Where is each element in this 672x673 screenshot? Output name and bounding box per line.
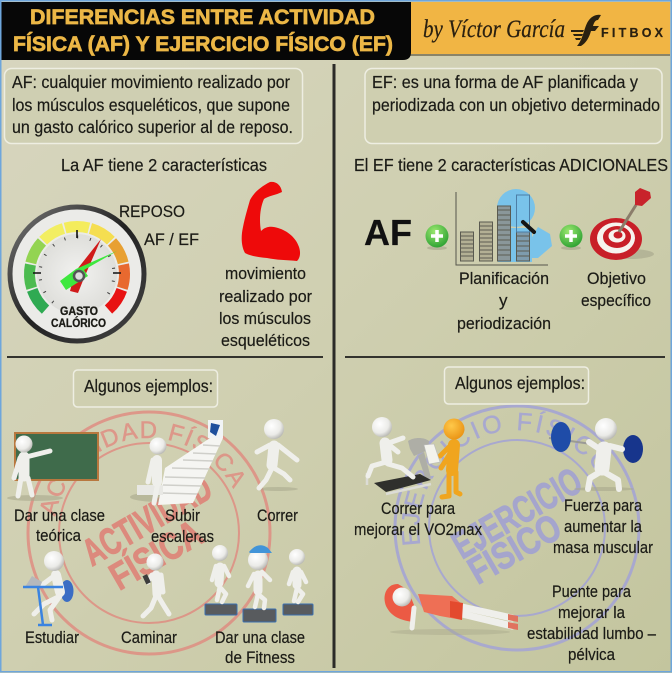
header author band — [400, 2, 670, 56]
example label: fuerza: Fuerza para — [564, 496, 642, 515]
caption line 2: realizado por — [219, 287, 312, 306]
examples box right — [444, 367, 588, 404]
label line 2: escaleras — [151, 527, 214, 546]
caption line 4: esqueléticos — [221, 331, 310, 350]
example: treadmill runner and coach — [367, 417, 464, 497]
legs — [462, 607, 512, 626]
icon: flexed arm muscle — [242, 182, 300, 261]
coach — [452, 445, 454, 470]
example: plank — [384, 584, 518, 635]
gauge label line 2: CALÓRICO — [51, 315, 106, 330]
example: teacher at blackboard — [7, 433, 98, 501]
label line 2: teórica — [36, 526, 81, 545]
examples box left — [74, 370, 218, 407]
example label: puente — [527, 582, 656, 664]
objective caption: Objetivo — [587, 269, 646, 288]
gauge — [10, 207, 144, 341]
label line 2: aumentar la — [564, 517, 642, 536]
title line 1: DIFERENCIAS ENTRE ACTIVIDAD — [30, 6, 375, 29]
muscle caption — [219, 264, 312, 350]
label line 2: mejorar el VO2max — [354, 520, 482, 539]
example label: teoría — [14, 506, 105, 545]
stamp center text 2: FÍSICA — [102, 511, 210, 599]
example: barbell lifter — [549, 418, 643, 491]
AF text line 3: un gasto calórico superior al de reposo. — [12, 117, 293, 137]
example label: puente: Puente para — [552, 582, 631, 601]
title band — [0, 2, 411, 60]
left horizontal divider — [7, 356, 323, 358]
label line 2: de Fitness — [225, 648, 295, 667]
author name: by Víctor García — [423, 16, 565, 43]
needle hub — [74, 271, 84, 281]
shirt and shorts — [418, 594, 462, 620]
example: walker — [142, 554, 169, 616]
caption periodización: periodización — [457, 314, 551, 333]
muscle caption: movimiento — [225, 264, 306, 283]
bar hatching — [461, 210, 529, 258]
heading: AF characteristics: La AF tiene 2 características — [61, 155, 267, 175]
gauge label: GASTO — [60, 304, 98, 318]
treadmill — [408, 438, 431, 480]
gauge label — [51, 304, 106, 330]
example: runner — [257, 419, 298, 491]
AF text line 1: AF: cualquier movimiento realizado por — [12, 72, 290, 92]
red hair — [384, 584, 416, 622]
example label: VO2max — [354, 499, 482, 539]
label line 3: masa muscular — [553, 538, 653, 557]
icon: plus 2 — [560, 224, 582, 250]
red needle: reposo — [70, 239, 101, 293]
stamp center text: EJERCICIO — [446, 460, 589, 568]
gauge ticks — [40, 237, 114, 302]
stamp: ejercicio físico — [394, 404, 640, 652]
feet — [508, 614, 518, 630]
AF large label: AF — [364, 212, 412, 253]
brand name: FITBOX — [601, 26, 664, 40]
stamp ring text: ACTIVIDAD FÍSICA — [40, 421, 244, 517]
icon: plus 1 — [426, 224, 448, 250]
example label: correr: Correr — [257, 506, 298, 525]
examples box right: Algunos ejemplos: — [455, 373, 585, 393]
label: reposo: REPOSO — [119, 202, 185, 221]
gauge colored scale — [10, 207, 144, 341]
label line 2: mejorar la — [558, 603, 625, 622]
caption específico: específico — [581, 291, 651, 310]
example label: fitness — [215, 628, 305, 667]
example label: VO2max: Correr para — [381, 499, 455, 518]
example label: teoría: Dar una clase — [14, 506, 105, 525]
stamp center text: ACTIVIDAD — [76, 467, 219, 575]
example: climbing stairs — [130, 420, 223, 505]
green needle: AF / EF — [60, 251, 117, 290]
example label: escaleras: Subir — [165, 506, 200, 525]
label line 4: pélvica — [568, 645, 615, 664]
panel: AF definition — [4, 68, 302, 144]
AF text line 2: los músculos esqueléticos, que supone — [12, 95, 290, 115]
gauge major ticks — [33, 230, 121, 273]
planning caption: Planificación — [459, 269, 549, 288]
icon: target and dart — [590, 188, 654, 260]
bar chart with planning figure — [456, 189, 552, 265]
step platforms — [205, 604, 313, 622]
icon: fitbox logo — [571, 15, 601, 46]
example: fitness class — [205, 545, 313, 622]
treadmill runner — [385, 443, 387, 460]
examples box left: Algunos ejemplos: — [84, 376, 213, 396]
caption y: y — [499, 291, 508, 310]
EF text line 1: EF: es una forma de AF planificada y — [372, 72, 638, 92]
right horizontal divider — [345, 356, 665, 358]
label: AF / EF: AF / EF — [144, 230, 199, 249]
caption line 3: los músculos — [219, 309, 311, 328]
planning caption — [457, 269, 551, 333]
stamp: actividad física — [26, 410, 272, 656]
example label: escaleras — [151, 506, 214, 546]
center vertical divider — [332, 64, 336, 668]
stamp ring text: EJERCICIO FÍSICO — [402, 411, 596, 545]
example label: fitness: Dar una clase — [215, 628, 305, 647]
objective caption — [581, 269, 651, 310]
example label: fuerza — [553, 496, 653, 557]
label line 3: estabilidad lumbo – — [527, 624, 656, 643]
panel: EF definition — [365, 68, 662, 144]
example label: caminar: Caminar — [121, 628, 177, 647]
clipboard — [424, 444, 440, 464]
bars — [460, 195, 530, 261]
stamp center text 2: FÍSICO — [460, 505, 569, 593]
example label: estudiar: Estudiar — [25, 628, 79, 647]
blue figure — [497, 189, 552, 262]
example: student — [23, 551, 74, 625]
chart axes — [456, 192, 548, 265]
title line 2: FÍSICA (AF) Y EJERCICIO FÍSICO (EF) — [13, 33, 393, 56]
pen — [523, 222, 534, 232]
